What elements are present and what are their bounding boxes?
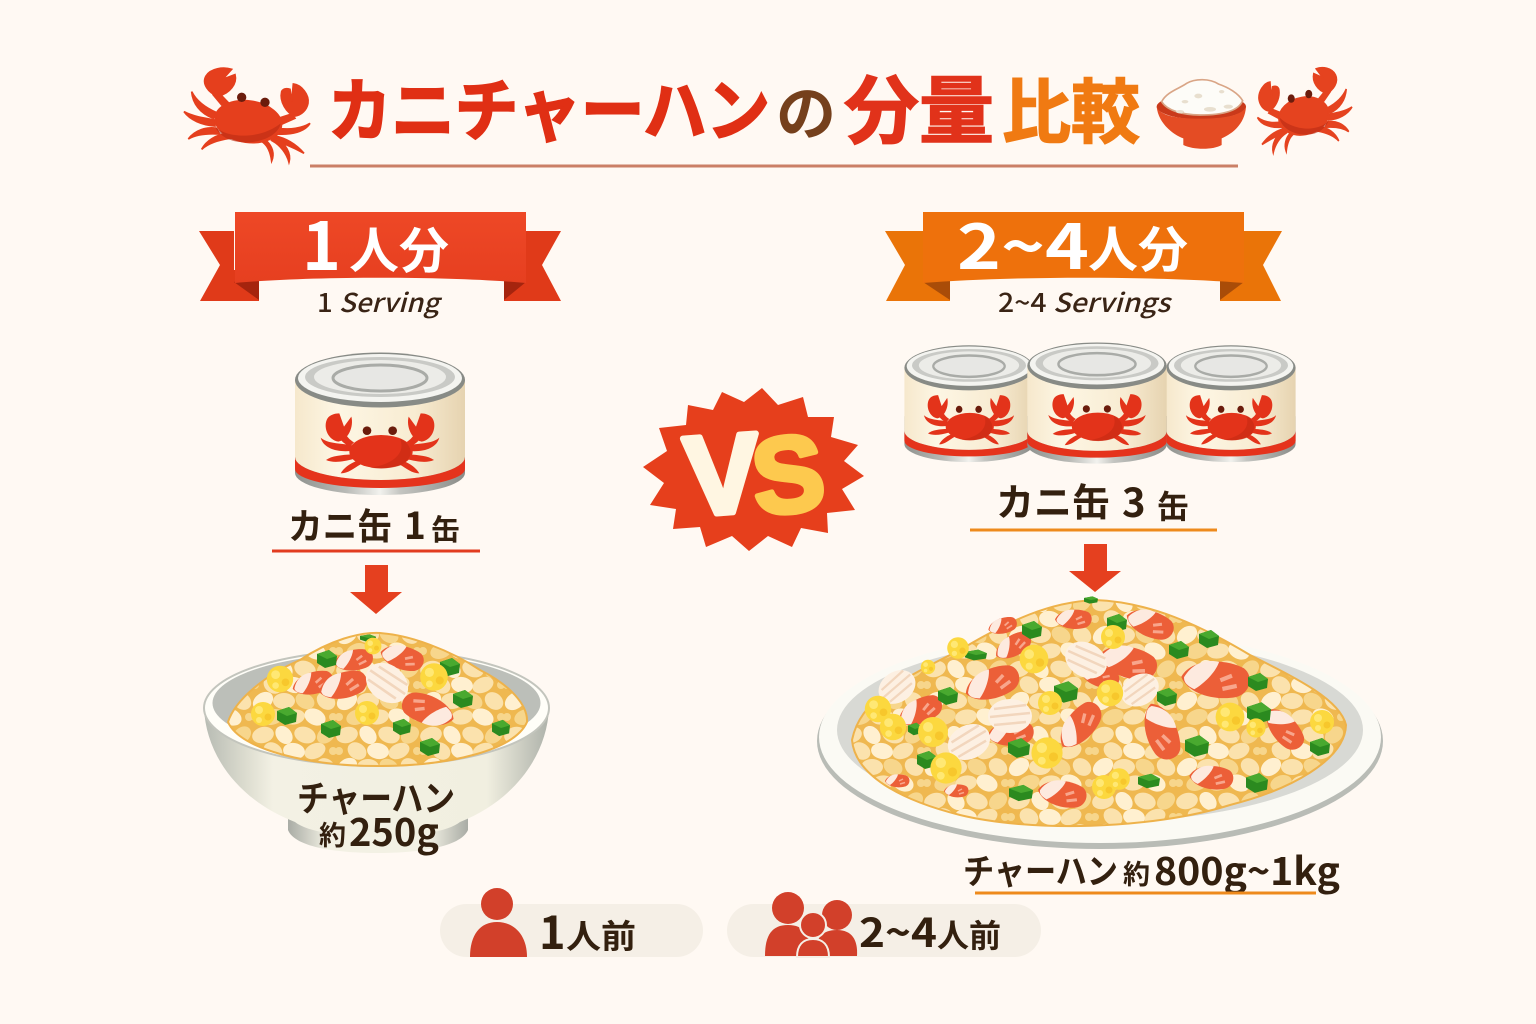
label: カニ缶 1缶: 1 (404, 496, 426, 550)
ribbon: 2~4人分 (885, 197, 1282, 301)
bowl label: チャーハン (297, 770, 455, 822)
label: カニ缶 3缶 (996, 471, 1189, 529)
title block (184, 52, 1352, 168)
VS badge: V (680, 410, 764, 539)
icon: family (765, 892, 857, 957)
text: 1人前: 人前 (566, 910, 636, 958)
VS badge (643, 388, 864, 551)
icon: crab can (295, 352, 465, 495)
icon: crab right (1258, 68, 1352, 153)
badge: 1 person (440, 888, 703, 962)
title: 分量: 分量 (844, 52, 994, 159)
text: 1人前 (539, 897, 636, 962)
plate of fried rice (817, 596, 1383, 849)
toppings (865, 596, 1334, 811)
rice mound (228, 633, 527, 766)
label: カニ缶 3缶: カニ缶 (996, 472, 1110, 527)
label: カニ缶 3缶: 缶 (1157, 482, 1189, 528)
ribbon: 2~4人分: 2~4 (957, 197, 1089, 287)
icon: one person (470, 888, 527, 957)
bowl label (297, 770, 455, 857)
bowl of fried rice (204, 633, 549, 857)
panel: 2-4 servings (817, 197, 1383, 896)
title: 比較: 比較 (1002, 57, 1140, 158)
subtitle: 1 Serving: 1 Serving (317, 283, 442, 320)
icon: three crab cans (904, 342, 1296, 464)
label: カニ缶 3缶: 3 (1122, 471, 1146, 529)
underline (975, 892, 1316, 894)
arrow (350, 565, 402, 614)
ribbon: 2~4人分: 人分 (1088, 211, 1188, 282)
icon: rice bowl (1157, 80, 1246, 149)
underline (970, 528, 1217, 532)
label: カニ缶 1缶: 缶 (431, 507, 460, 549)
badge: 2-4 people (727, 892, 1041, 959)
text: 2~4人前 (859, 901, 1001, 959)
text: 1人前: 1 (539, 897, 566, 962)
plate label: チャーハン (963, 844, 1118, 895)
bowl label: 250g (349, 802, 439, 857)
bowl label: 約 (319, 814, 346, 853)
text: 2~4人前: 人前 (937, 911, 1001, 957)
ribbon: 1人分: 人分 (349, 212, 449, 283)
toppings (251, 634, 510, 756)
VS badge: S (746, 411, 830, 538)
text: 2~4人前: 2~4 (859, 901, 937, 959)
plate label (963, 841, 1340, 896)
label: カニ缶 1缶: カニ缶 (288, 498, 392, 550)
plate label: 約 (1123, 853, 1150, 892)
plate label: 800g~1kg (1154, 841, 1340, 896)
arrow (1069, 544, 1121, 592)
ribbon: 1人分: 1 (302, 194, 341, 290)
rice mound (852, 600, 1346, 826)
label: カニ缶 1缶 (288, 496, 460, 550)
title: カニチャーハン: カニチャーハン (328, 56, 770, 155)
subtitle: 2~4 Servings: 2~4 Servings (998, 283, 1173, 320)
icon: crab left (184, 68, 310, 162)
underline (272, 550, 480, 552)
title underline (310, 164, 1238, 168)
panel: 1 serving (199, 194, 561, 857)
ribbon: 1人分 (199, 194, 561, 301)
title: の: の (776, 66, 836, 153)
